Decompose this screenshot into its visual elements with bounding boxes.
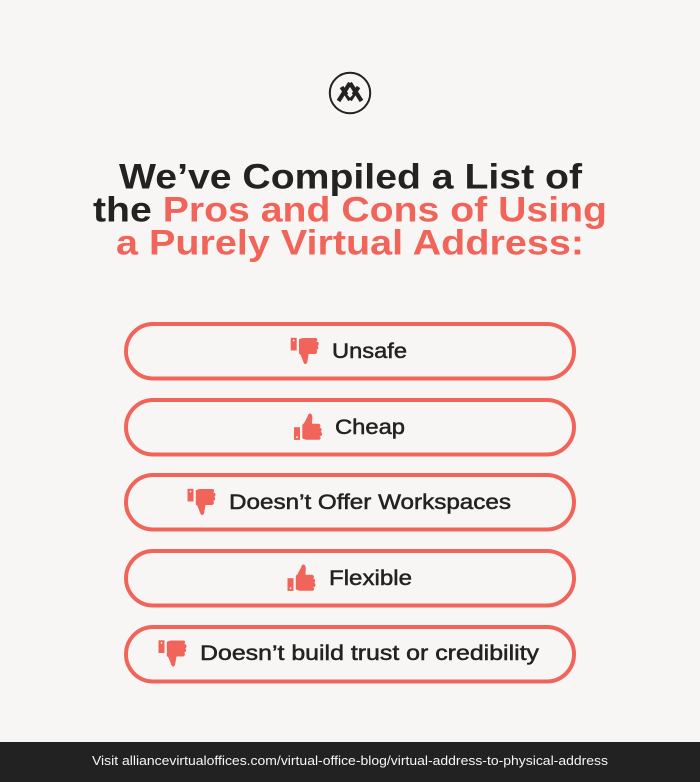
label: Cheap: Cheap [335,416,405,439]
panel: Doesn't Offer Workspaces (con) [126,475,574,530]
icon: thumbs down [188,489,216,515]
footer link text: Visit alliancevirtualoffices.com/virtual-office-blog/virtual-address-to-physical-address [92,753,609,768]
icon: thumbs down [291,338,319,364]
panel: Doesn't build trust or credibility (con) [126,627,574,682]
title: a Purely Virtual Address: [116,222,584,262]
icon: thumbs up [294,414,322,440]
footer [0,742,700,782]
title [93,156,607,262]
panel: Cheap (pro) [126,400,574,454]
title: We’ve Compiled a List of [119,156,582,196]
label: Unsafe: Unsafe [332,340,407,363]
label: Doesn't Offer Workspaces: Doesn’t Offer Workspaces [229,491,511,514]
label: Flexible: Flexible [329,567,412,590]
icon: thumbs up [288,564,316,591]
label: Doesn't build trust or credibility: Doesn’t build trust or credibility [200,642,540,665]
icon: thumbs down [158,640,186,667]
title: the Pros and Cons of Using [93,190,607,230]
icon: logo [330,73,370,113]
panel: Flexible (pro) [126,551,574,606]
panel: Unsafe (con) [126,324,574,378]
